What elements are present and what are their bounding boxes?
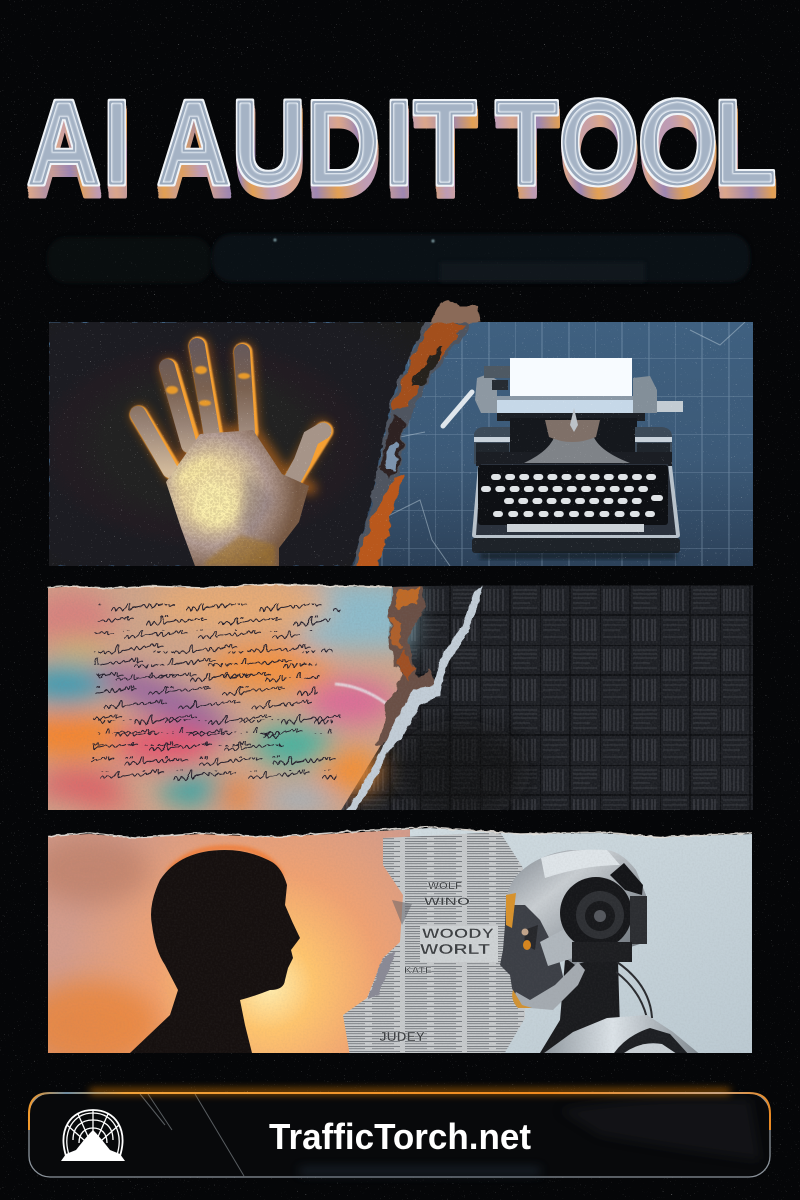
keyboard: [472, 464, 680, 559]
helmet: [505, 850, 646, 965]
sunset backdrop left: [48, 829, 410, 1053]
newspaper headlines: WOODY: [422, 925, 495, 941]
cracked tear: [352, 322, 470, 566]
newspaper headlines: JUDEY: [379, 1029, 425, 1044]
panel 2 torn paper rim: [48, 584, 392, 589]
footer url: TrafficTorch.net: [269, 1116, 531, 1157]
carriage: [443, 366, 683, 426]
panel 1 dark left background: [49, 322, 440, 566]
ghost subtitle bar: [47, 234, 750, 283]
handwriting scribble: [92, 604, 340, 782]
man silhouette: [130, 848, 300, 1053]
paper: [510, 358, 632, 396]
footer glass pill: [29, 1093, 770, 1177]
neck and wires: [540, 960, 652, 1053]
tear tip above panel: [430, 300, 481, 323]
orange glow edge: [29, 1089, 770, 1130]
icon: typewriter: [443, 358, 683, 559]
exposed mechanism: [560, 863, 647, 962]
type basket: [524, 438, 630, 463]
newspaper headlines: WOLF: [428, 881, 462, 892]
footer smoke: [300, 1099, 760, 1174]
footer bar: [29, 1089, 770, 1177]
dark printed grid: [340, 585, 753, 820]
icon: glowing hand: [138, 346, 324, 568]
torn rust patch: [376, 584, 436, 745]
title: chrome AI AUDIT TOOL: AI AUDIT TOOL: [26, 75, 777, 210]
panel 3 grain: [66, 834, 658, 1053]
panel 1 grain: [49, 322, 753, 566]
panel 2: handwriting versus printed grid: [48, 584, 753, 810]
newspaper headlines: KATE: [404, 966, 433, 975]
pale backdrop right: [380, 828, 752, 1053]
newspaper tear: [343, 832, 525, 1056]
panel 2 grain: [48, 585, 753, 810]
newspaper headlines: [379, 881, 498, 1044]
newspaper headlines: WINO: [424, 896, 471, 908]
rainbow paper: [15, 577, 410, 813]
panel 1 blue tile background: [49, 322, 753, 566]
cheek and jaw: [540, 930, 572, 966]
torn paper rim: [48, 827, 752, 838]
face: [500, 905, 565, 1008]
title: chrome AI AUDIT TOOL: AI AUDIT TOOL: [26, 75, 777, 210]
white torn edge: [344, 585, 482, 812]
typewriter body: [474, 408, 672, 466]
robot head: [500, 850, 702, 1056]
panel 1: glowing hand versus typewriter: [49, 300, 753, 570]
shoulder: [544, 1015, 698, 1053]
icon: radar torch logo: [61, 1110, 125, 1161]
glass streaks: [140, 1094, 244, 1176]
newspaper headlines: WORLT: [420, 941, 490, 958]
panel 3: silhouette versus robot: [20, 827, 752, 1070]
